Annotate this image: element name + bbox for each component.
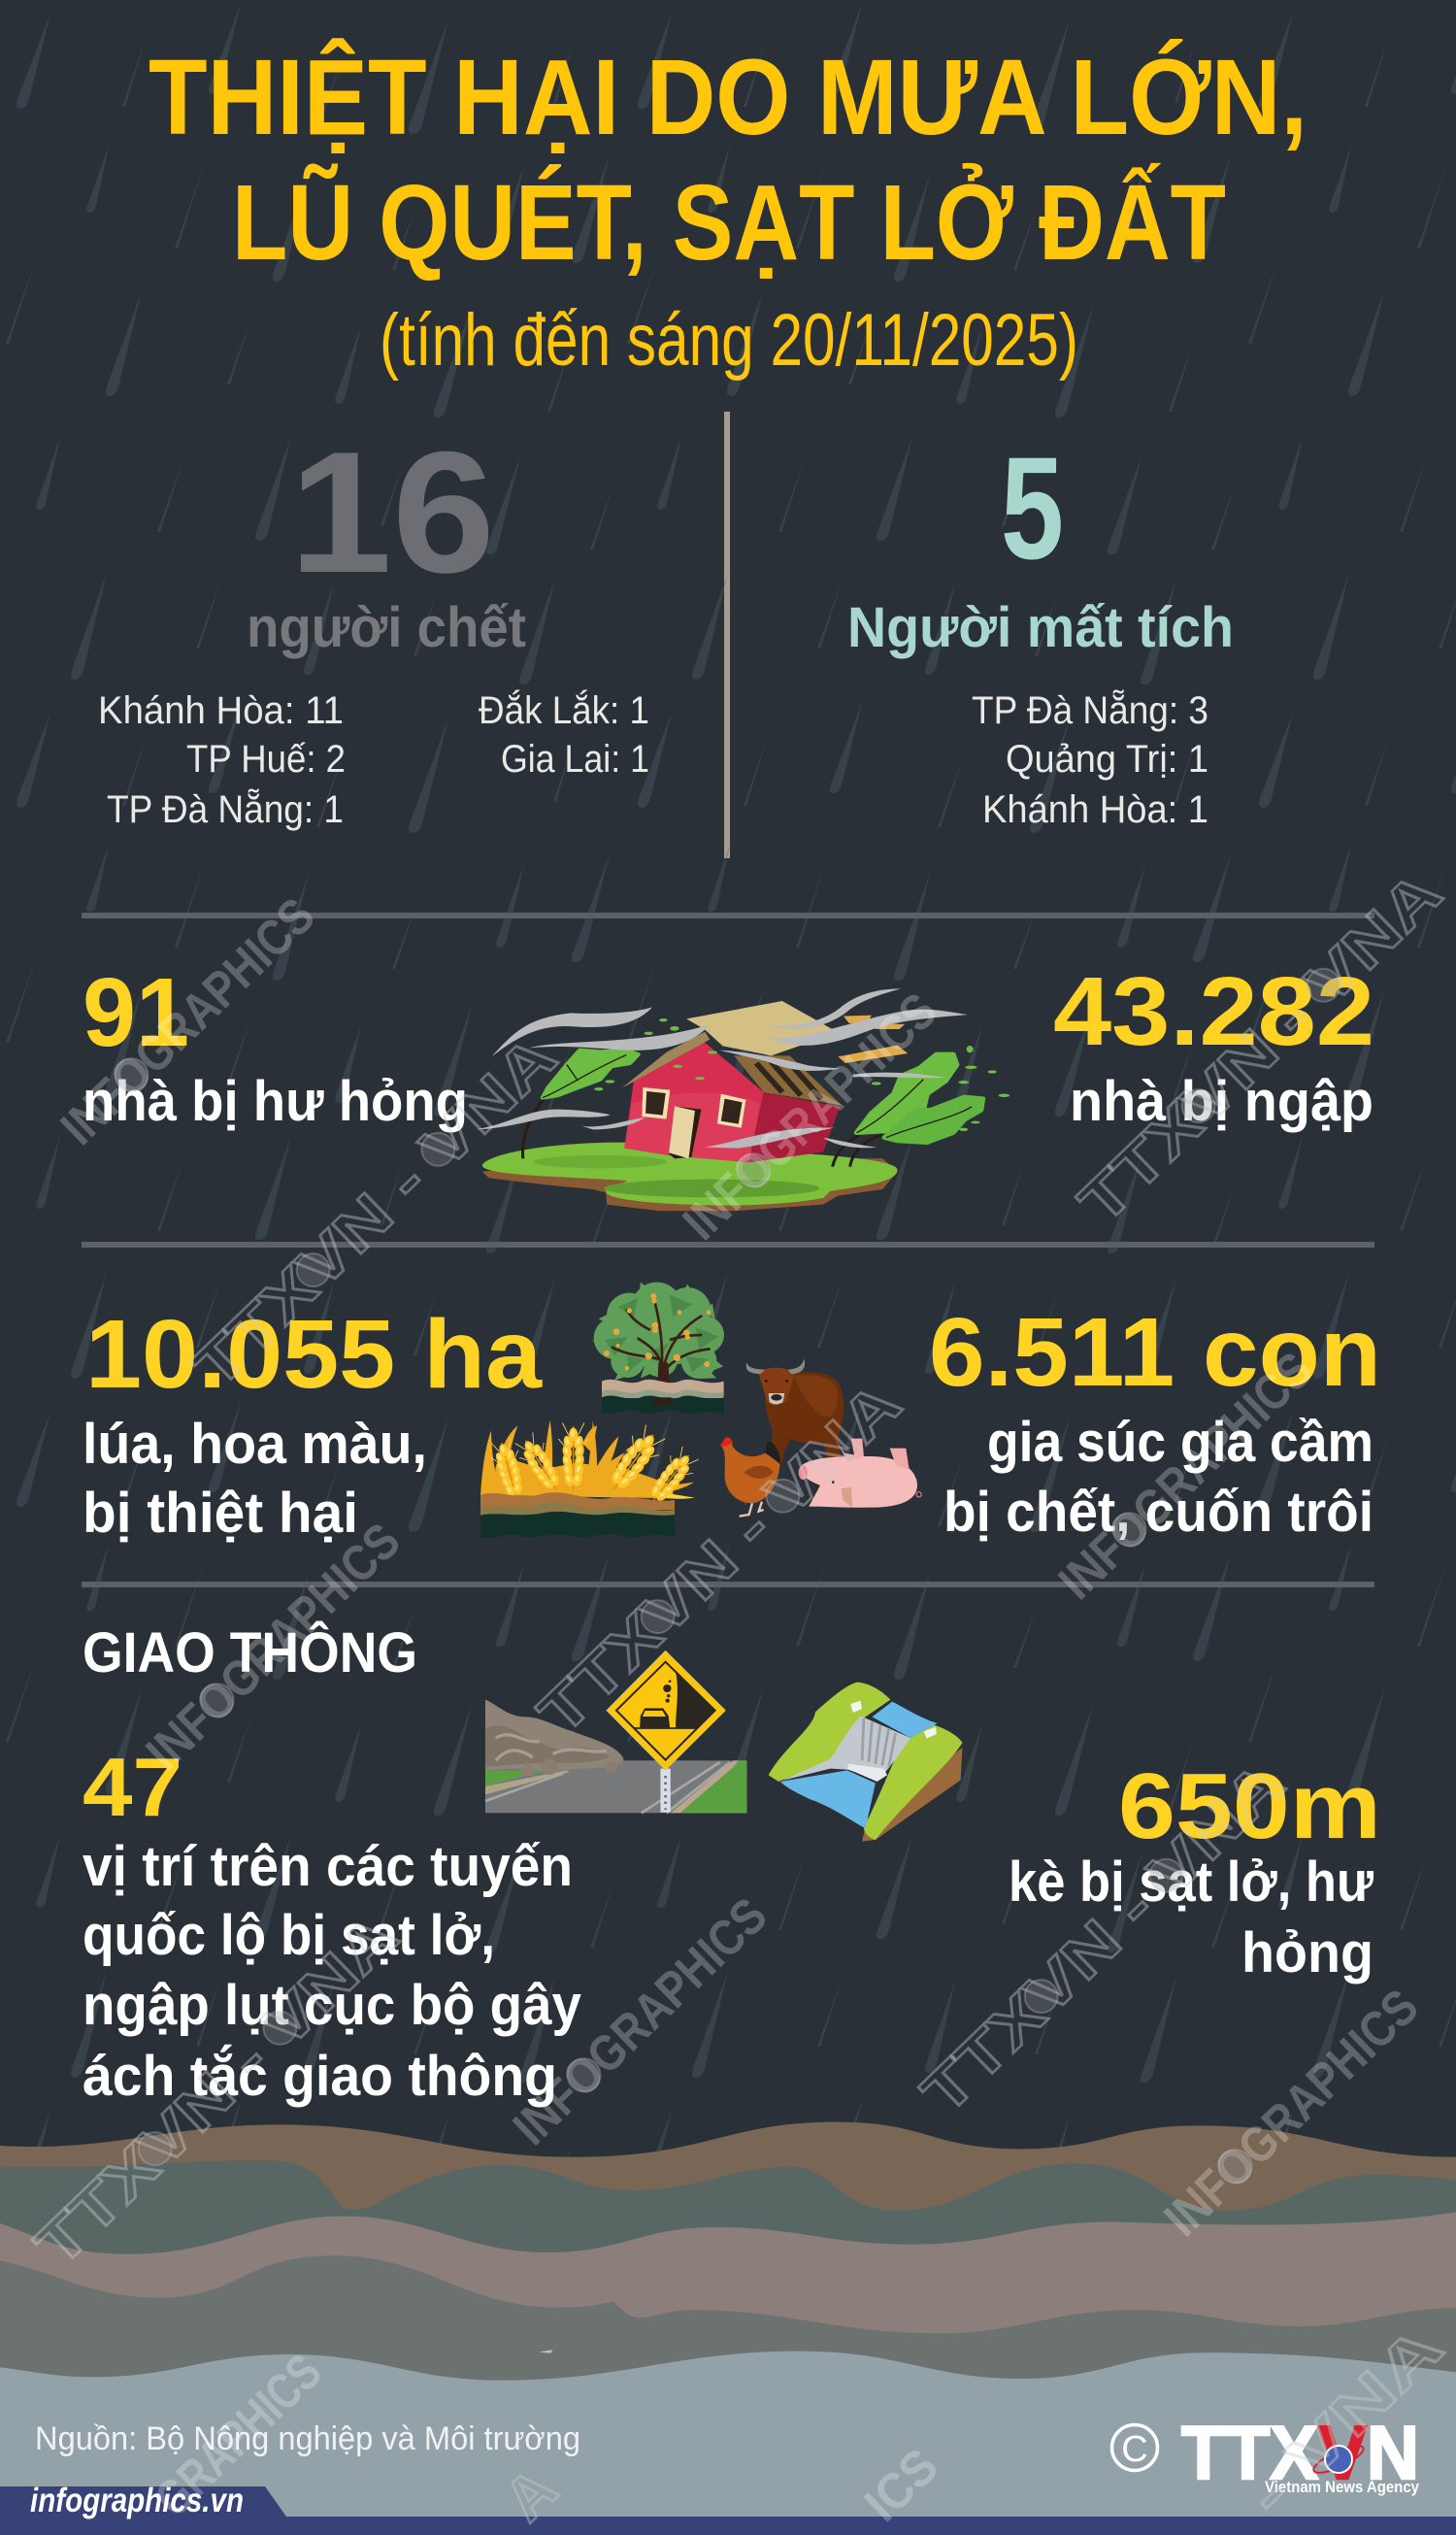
footer band — [0, 2486, 1456, 2535]
icon: landslide road sign — [485, 1651, 746, 1813]
stat: livestock lost: 6.511 con — [929, 1298, 1381, 1407]
stat: road blockages: 47 — [83, 1742, 182, 1834]
stat: livestock lost — [929, 1298, 1381, 1544]
footer site name: infographics.vn — [30, 2482, 244, 2519]
stat: road blockages — [83, 1742, 581, 2108]
list: missing by province: Khánh Hòa: 1 — [982, 788, 1208, 831]
title: THIỆT HẠI DO MƯA LỚN, — [149, 38, 1307, 157]
list: deaths by province: Đắk Lắk: 1 — [479, 688, 649, 732]
list: deaths by province: Gia Lai: 1 — [501, 738, 649, 781]
label: missing: Người mất tích — [847, 596, 1234, 659]
logo: TTXVN: Vietnam News Agency — [1265, 2478, 1419, 2496]
background: flood water waves — [0, 2122, 1456, 2535]
list: missing by province: TP Đà Nẵng: 3 — [972, 688, 1208, 732]
icon: copyright: C — [1121, 2429, 1148, 2470]
list: deaths by province: TP Huế: 2 — [186, 738, 346, 781]
stat: damaged houses: 91 — [83, 958, 189, 1067]
source note: Nguồn: Bộ Nông nghiệp và Môi trường — [35, 2420, 580, 2457]
watermarks: INFOGRAPHICS — [1048, 1342, 1323, 1611]
icon: bull — [746, 1358, 844, 1464]
icon: chicken — [720, 1437, 780, 1517]
watermarks: - VNA — [1236, 2313, 1456, 2529]
stat: flooded houses: 43.282 — [1053, 957, 1374, 1066]
stat: crops damaged — [83, 1300, 543, 1545]
list: deaths by province: TP Đà Nẵng: 1 — [107, 787, 344, 831]
panel: deaths — [98, 416, 649, 831]
panel: missing — [847, 426, 1234, 831]
watermarks: INFOGRAPHICS — [503, 1887, 778, 2156]
stat: damaged houses: nhà bị hư hỏng — [83, 1070, 468, 1133]
icon: rice field in flood — [480, 1420, 702, 1538]
number: 16 deaths: 16 — [289, 416, 495, 609]
list: deaths by province — [98, 688, 649, 831]
watermarks: ICS — [854, 2438, 949, 2533]
stat: flooded houses: nhà bị ngập — [1070, 1070, 1373, 1133]
icon: copyright — [1112, 2425, 1157, 2470]
watermarks: INFOGRAPHICS — [673, 983, 947, 1251]
label: deaths: người chết — [247, 596, 526, 659]
watermarks: INFOGRAPHICS — [136, 1513, 411, 1782]
watermarks: GRAPHICS — [145, 2344, 333, 2528]
logo: TTXVN: TTXVN — [1181, 2410, 1419, 2495]
stat: road blockages: ách tắc giao thông — [83, 2045, 557, 2108]
stat: flooded houses — [1053, 957, 1374, 1133]
watermarks: INFOGRAPHICS — [50, 887, 325, 1156]
icon: dead pig — [799, 1439, 921, 1508]
stat: road blockages: quốc lộ bị sạt lở, — [83, 1904, 495, 1967]
stat: damaged houses — [83, 958, 468, 1133]
stat: livestock lost: bị chết, cuốn trôi — [943, 1481, 1373, 1544]
list: missing by province: Quảng Trị: 1 — [1006, 738, 1208, 781]
stat: embankment: hỏng — [1241, 1921, 1373, 1985]
title — [149, 38, 1307, 283]
list: deaths by province: Khánh Hòa: 11 — [98, 689, 344, 732]
stat: road blockages: vị trí trên các tuyến — [83, 1835, 573, 1898]
icon: fruit tree in flood — [593, 1283, 724, 1415]
watermarks — [23, 859, 1456, 2534]
stat: crops damaged: bị thiệt hại — [83, 1482, 358, 1545]
icon: dam — [769, 1683, 962, 1842]
stat: embankment — [1009, 1754, 1381, 1985]
watermarks: TTXVN - VNA — [910, 1750, 1297, 2127]
icon: crops and livestock — [480, 1283, 921, 1538]
stat: road blockages: ngập lụt cục bộ gây — [83, 1974, 581, 2037]
watermarks: TTXVN - VNA — [526, 1370, 913, 1748]
title: LŨ QUÉT, SẠT LỞ ĐẤT — [232, 163, 1226, 283]
watermarks: A — [492, 2455, 570, 2534]
stat: embankment: kè bị sạt lở, hư — [1009, 1851, 1373, 1914]
heading: transport: GIAO THÔNG — [83, 1621, 417, 1684]
stat: crops damaged: 10.055 ha — [85, 1300, 543, 1409]
stat: crops damaged: lúa, hoa màu, — [83, 1413, 427, 1476]
icon: house in storm — [476, 988, 1009, 1211]
watermarks: TTXVN - VNA — [23, 1902, 411, 2280]
watermarks: TTXVN - VNA — [182, 1023, 569, 1401]
watermarks: TTXVN - VNA — [1067, 859, 1454, 1237]
list: missing by province — [972, 688, 1208, 831]
stat: livestock lost: gia súc gia cầm — [987, 1411, 1373, 1474]
stat: embankment: 650m — [1118, 1754, 1381, 1858]
subtitle: date: (tính đến sáng 20/11/2025) — [380, 299, 1078, 382]
number: 5 missing: 5 — [1001, 426, 1064, 589]
